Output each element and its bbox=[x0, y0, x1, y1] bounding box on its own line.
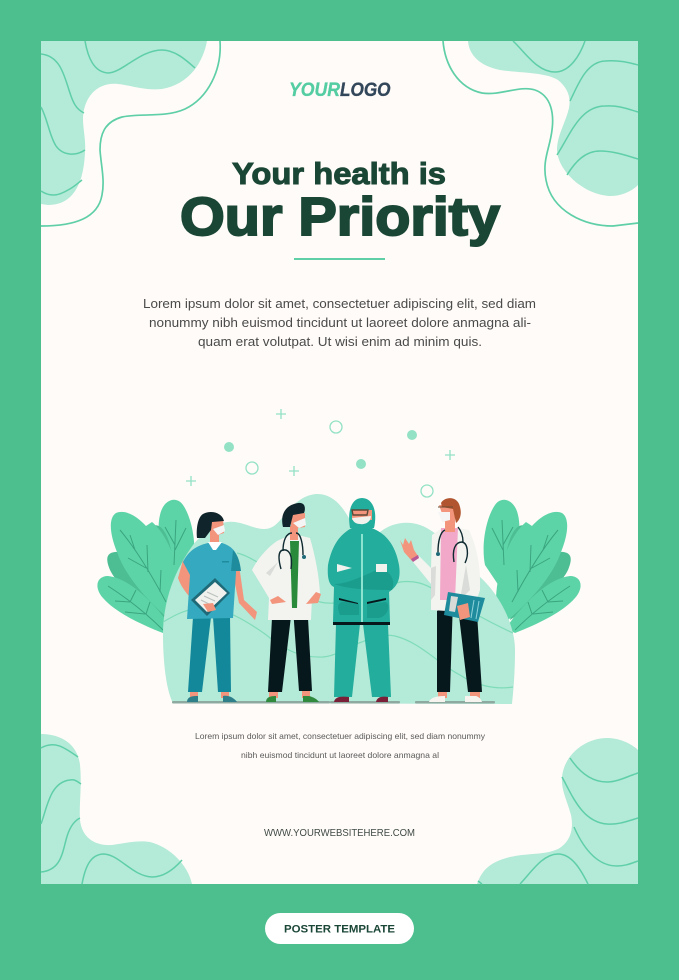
decoration: bottom-left waves bbox=[41, 734, 192, 884]
left leaves bbox=[97, 500, 194, 633]
intro text: Lorem ipsum dolor sit amet, consectetuer adipiscing elit, sed diam bbox=[143, 296, 536, 311]
caption: Lorem ipsum dolor sit amet, consectetuer adipiscing elit, sed diam nonummy bbox=[195, 731, 486, 741]
panel: cream poster sheet bbox=[41, 41, 638, 884]
illustration backdrop blob bbox=[163, 494, 515, 704]
figure: doctor with folder bbox=[400, 498, 485, 702]
decoration: top-left waves bbox=[41, 41, 220, 226]
decoration: bottom-right waves bbox=[477, 738, 638, 884]
title bbox=[180, 156, 500, 247]
button: poster template bbox=[265, 913, 414, 944]
logo: LOGO bbox=[340, 79, 390, 101]
intro text: quam erat volutpat. Ut wisi enim ad minim quis. bbox=[198, 334, 482, 349]
figure: doctor with stethoscope bbox=[252, 503, 321, 702]
button: poster template: POSTER TEMPLATE bbox=[284, 924, 395, 936]
logo bbox=[289, 79, 390, 101]
title: Your health is bbox=[232, 156, 446, 191]
logo: YOUR bbox=[289, 79, 340, 101]
intro text bbox=[143, 296, 536, 349]
floating dots and plus signs bbox=[186, 409, 455, 497]
title underline bbox=[294, 258, 385, 260]
title: Our Priority bbox=[180, 187, 500, 247]
intro text: nonummy nibh euismod tincidunt ut laoreet dolore anmagna ali- bbox=[149, 315, 531, 330]
caption: nibh euismod tincidunt ut laoreet dolore anmagna al bbox=[241, 750, 439, 760]
ground shadows bbox=[172, 701, 495, 704]
website: WWW.YOURWEBSITEHERE.COM bbox=[264, 827, 415, 839]
figure: protective suit bbox=[328, 498, 400, 702]
decoration: top-right waves bbox=[443, 41, 638, 226]
caption bbox=[195, 731, 486, 760]
figure: nurse bbox=[178, 512, 257, 702]
right leaves bbox=[484, 500, 581, 633]
